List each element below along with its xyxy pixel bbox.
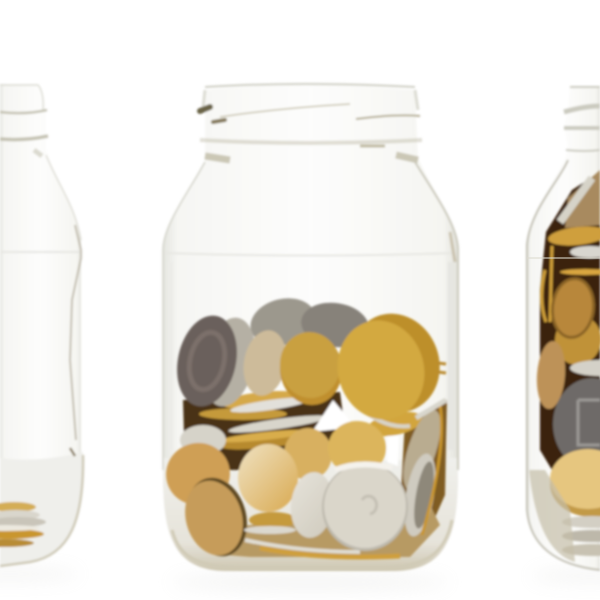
lower gold coins	[284, 428, 332, 480]
white gap seen through the jar	[312, 400, 352, 432]
rear silver coins	[249, 296, 312, 346]
right jar wall highlight	[530, 255, 538, 455]
centre jar shoulder and walls	[163, 162, 458, 470]
right jar glass	[527, 86, 600, 570]
floor shadows	[0, 568, 600, 590]
bottom bed of coins	[229, 508, 441, 558]
centre jar lug	[200, 107, 210, 111]
gold centre coin	[279, 346, 342, 407]
left jar glass	[0, 84, 81, 566]
left lower coins	[180, 425, 226, 455]
right jar	[527, 86, 600, 570]
left jar coins	[0, 502, 46, 547]
centre jar	[159, 84, 458, 571]
centre jar glass	[163, 85, 458, 571]
rear gold big coin	[369, 410, 423, 438]
right side edge-on coins	[402, 409, 442, 489]
flat stacked coins	[199, 408, 287, 420]
small bottom stack	[249, 512, 297, 528]
centre jar coins	[159, 292, 453, 563]
big gold coin	[338, 320, 425, 420]
pale gold coin	[238, 444, 298, 512]
centre jar neck threads	[200, 84, 422, 160]
left jar neck rings	[0, 85, 81, 240]
large grey coin stack	[212, 316, 255, 408]
silver coins	[290, 470, 329, 540]
pale coin	[243, 329, 286, 397]
left jar right edge	[70, 225, 81, 440]
right jar coins	[529, 170, 600, 562]
left jar	[0, 84, 83, 566]
right jar neck rings	[564, 87, 600, 151]
dark interior	[183, 392, 345, 470]
centre jar base rim	[172, 520, 452, 568]
